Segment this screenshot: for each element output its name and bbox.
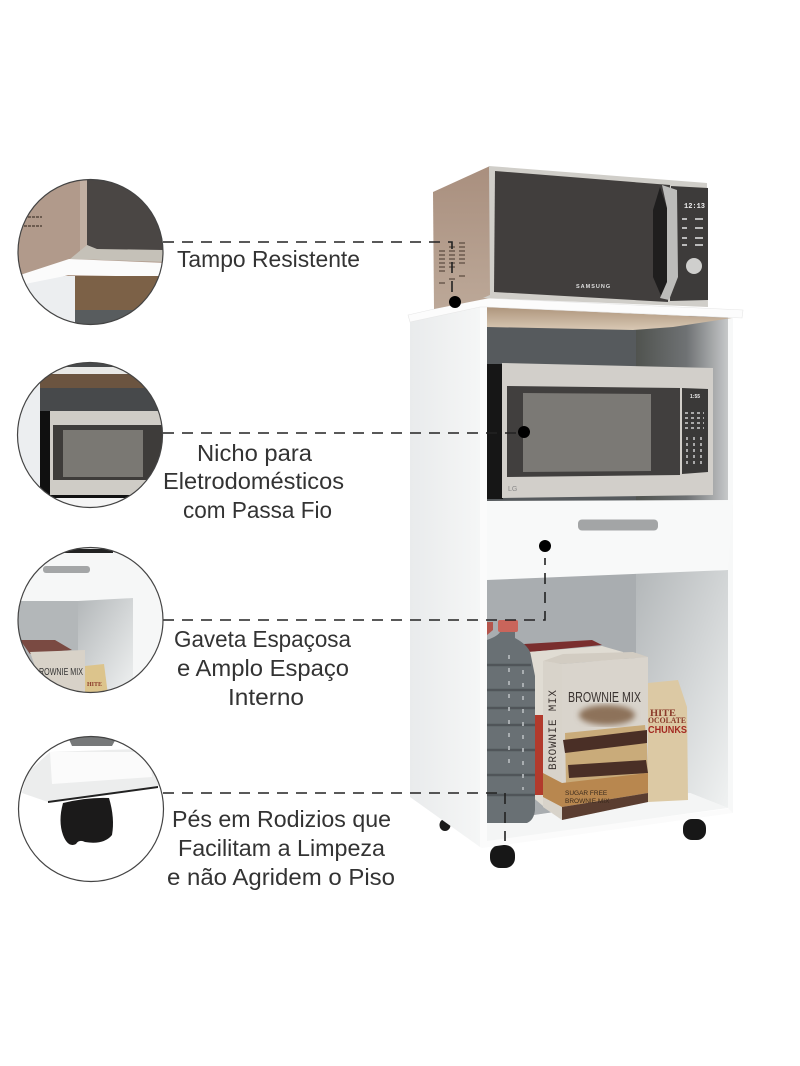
chocolate chunks package: CHUNKS	[648, 725, 687, 736]
keypad	[685, 413, 704, 467]
dashed connector: tampo	[163, 242, 452, 295]
lower niche	[487, 570, 728, 841]
window	[523, 393, 651, 472]
marker dot: tampo	[449, 296, 461, 308]
label: pés em rodizios	[167, 806, 395, 890]
blurred brownie	[579, 705, 635, 725]
chocolate chunks package: OCOLATE	[648, 716, 686, 725]
detail circle: nicho	[15, 360, 167, 510]
drawer	[487, 500, 733, 580]
right wheel	[683, 819, 706, 840]
logo: LG	[508, 486, 517, 493]
upper back wall	[487, 316, 637, 502]
detail circle: gaveta: HITE	[87, 682, 102, 688]
lower right wall	[636, 570, 728, 808]
detail circle: rodizios	[15, 735, 167, 885]
upper right wall	[636, 316, 728, 502]
door handle	[660, 185, 678, 300]
red box	[524, 640, 602, 652]
control panel	[670, 186, 708, 301]
top board	[408, 298, 743, 322]
display label: 1:55	[690, 394, 700, 400]
rear box	[528, 646, 623, 806]
label: gaveta espaçosa: Interno	[228, 684, 304, 710]
label: gaveta espaçosa: Gaveta Espaçosa	[174, 626, 351, 652]
door	[494, 171, 670, 302]
detail circle: gaveta: ROWNIE MIX	[39, 667, 83, 678]
label: nicho para eletrodomésticos: Nicho para	[197, 440, 312, 466]
cabinet furniture	[408, 298, 743, 868]
brownie stack	[565, 725, 648, 785]
Samsung microwave on top	[433, 166, 708, 309]
box top	[543, 652, 648, 664]
label: nicho para eletrodomésticos	[163, 440, 344, 523]
box band	[543, 773, 648, 807]
drawer handle	[578, 520, 658, 530]
underside of top	[487, 307, 732, 330]
label: pés em rodizios: e não Agridem o Piso	[167, 864, 395, 890]
band text: SUGAR FREE	[565, 790, 608, 797]
microwave body	[483, 166, 708, 307]
brand: SAMSUNG	[576, 284, 611, 290]
panel buttons	[682, 219, 703, 245]
clock: 12:13	[684, 203, 705, 211]
label: tampo resistente: Tampo Resistente	[177, 246, 360, 272]
cabinet front edge and right edge	[480, 307, 733, 848]
knob	[686, 258, 702, 274]
box spine	[543, 661, 562, 820]
box front	[562, 657, 648, 820]
water bottle	[487, 620, 535, 823]
body	[502, 363, 713, 498]
microwave side	[433, 166, 490, 309]
door	[507, 386, 680, 477]
cabinet left side	[410, 307, 480, 847]
control panel	[682, 388, 708, 474]
label: gaveta espaçosa	[174, 626, 351, 710]
brownie box: BROWNIE MIX	[565, 798, 610, 805]
label: nicho para eletrodomésticos: Eletrodomésticos	[163, 468, 344, 494]
chocolate chunks package	[648, 680, 688, 802]
dashed connector: nicho	[163, 432, 518, 434]
LG microwave in niche	[487, 363, 713, 499]
label: pés em rodizios: Facilitam a Limpeza	[178, 835, 385, 861]
groceries	[487, 620, 688, 823]
marker dot: nicho	[518, 426, 530, 438]
side vents	[439, 243, 465, 283]
dashed connector: gaveta	[163, 558, 545, 620]
shelf floor	[487, 793, 728, 841]
dashed connector: rodizios	[163, 793, 505, 841]
marker dot: gaveta	[539, 540, 551, 552]
package text: HITE	[650, 708, 676, 718]
box title: BROWNIE MIX	[568, 689, 641, 706]
door handle recess	[653, 187, 667, 298]
front wheel	[490, 845, 515, 868]
spine text: BROWNIE MIX	[548, 690, 560, 770]
detail circle: tampo	[15, 178, 167, 330]
back wheel	[440, 819, 450, 831]
brownie box	[543, 652, 648, 820]
upper niche	[487, 307, 732, 502]
side	[487, 364, 503, 499]
label: gaveta espaçosa: e Amplo Espaço	[177, 655, 349, 681]
label: pés em rodizios: Pés em Rodizios que	[172, 806, 391, 832]
label: nicho para eletrodomésticos: com Passa Fio	[183, 497, 332, 523]
lower back wall	[487, 570, 636, 822]
detail circle: gaveta	[15, 545, 167, 696]
